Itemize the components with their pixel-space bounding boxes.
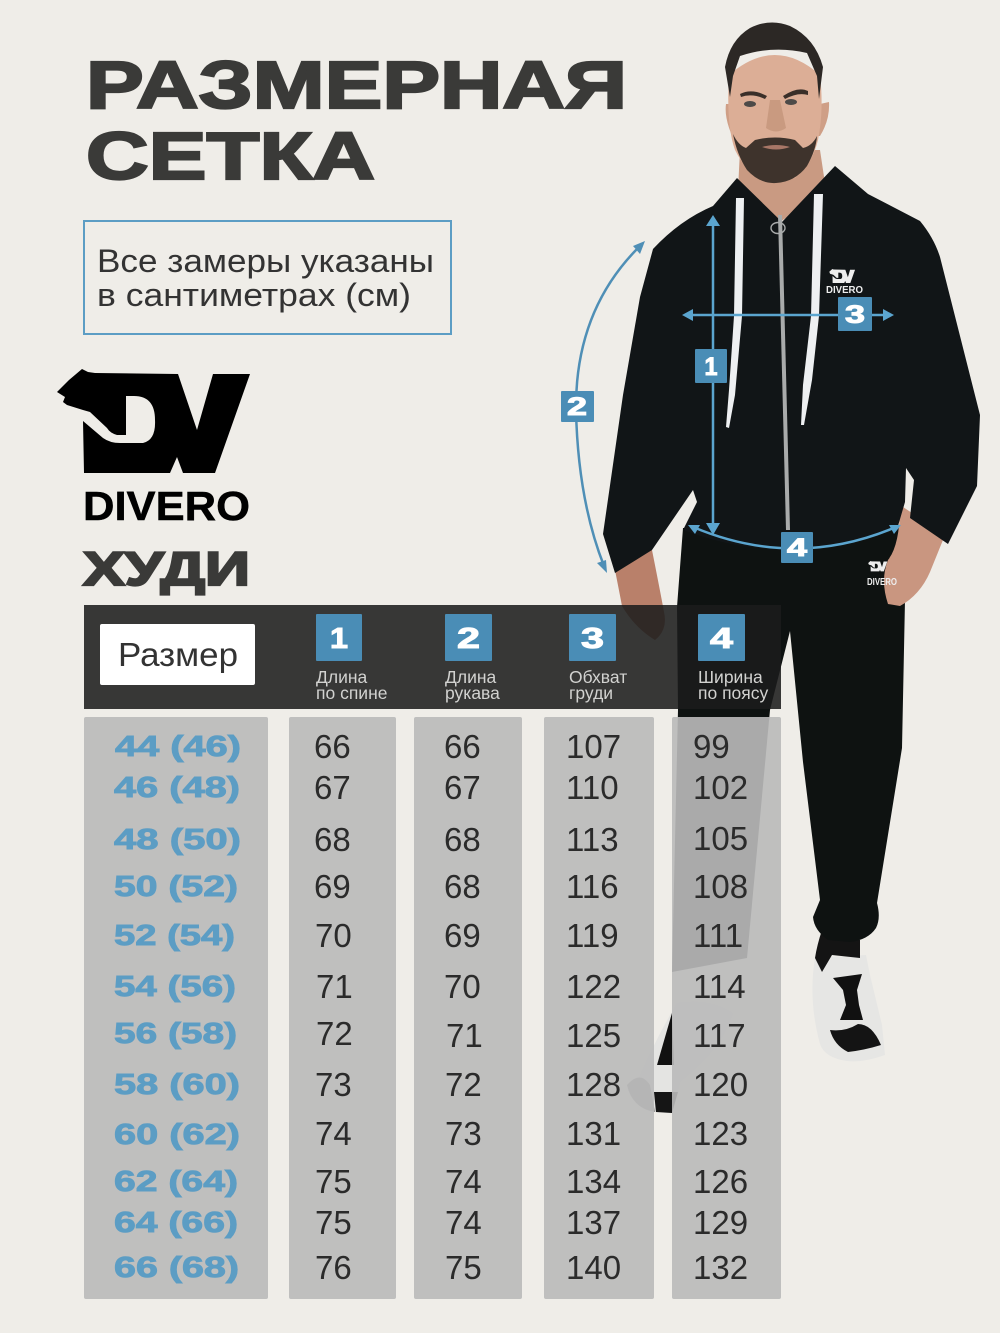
column 2: sleeve length	[414, 717, 522, 1299]
column 1: back length: 72	[316, 1015, 353, 1052]
hoodie	[603, 166, 980, 573]
column: sizes: 52 (54)	[114, 920, 235, 952]
arrow 4: waist width	[688, 525, 901, 563]
column 1 heading: 1	[330, 623, 348, 655]
column 3: chest girth: 128	[566, 1066, 621, 1103]
right hand	[884, 505, 945, 606]
column 4: waist width: 108	[693, 868, 748, 905]
left hand	[612, 540, 665, 640]
size label	[100, 624, 255, 685]
column 3: chest girth: 113	[566, 821, 619, 858]
column 3: chest girth: 116	[566, 868, 619, 905]
hoodie drawstrings	[726, 194, 823, 428]
table header	[84, 605, 781, 709]
column 4: waist width: 102	[693, 769, 748, 806]
arrow 3: chest girth: 3	[845, 301, 865, 329]
column 2 heading: 2	[457, 623, 480, 655]
column 4 heading: Ширина	[698, 667, 763, 687]
column: sizes: 44 (46)	[115, 731, 241, 763]
column: sizes	[84, 717, 268, 1299]
column 3: chest girth: 110	[566, 769, 619, 806]
column 2: sleeve length: 74	[445, 1204, 482, 1241]
column 2: sleeve length: 68	[444, 821, 481, 858]
column 4: waist width: 126	[693, 1163, 748, 1200]
column 3 heading: груди	[569, 683, 613, 703]
column 4: waist width: 123	[693, 1115, 748, 1152]
column: sizes: 60 (62)	[114, 1119, 240, 1151]
column 2: sleeve length: 73	[445, 1115, 482, 1152]
column 1: back length: 73	[315, 1066, 352, 1103]
column 2: sleeve length: 69	[444, 917, 481, 954]
column: sizes: 50 (52)	[114, 871, 238, 903]
arrow 2: sleeve length	[561, 241, 645, 573]
column 4: waist width: 129	[693, 1204, 748, 1241]
arrow 3: chest girth	[682, 297, 894, 331]
column 1: back length: 74	[315, 1115, 352, 1152]
column 4 heading: 4	[710, 623, 733, 655]
column 1 heading	[316, 614, 387, 703]
column 4: waist width	[672, 717, 781, 1299]
column 2: sleeve length: 71	[446, 1017, 483, 1054]
zipper	[771, 215, 788, 530]
column: sizes: 48 (50)	[114, 824, 241, 856]
column 4: waist width: 111	[693, 917, 743, 954]
column 2: sleeve length: 72	[445, 1066, 482, 1103]
column 2: sleeve length: 68	[444, 868, 481, 905]
column 1: back length: 70	[315, 917, 352, 954]
column 3 heading	[569, 614, 627, 703]
column 1: back length: 71	[316, 968, 353, 1005]
title	[86, 48, 627, 194]
column 1: back length: 67	[314, 769, 351, 806]
column 2: sleeve length: 67	[444, 769, 481, 806]
trousers logo	[867, 561, 897, 588]
column: sizes: 46 (48)	[114, 772, 240, 804]
column 4 heading	[698, 614, 769, 703]
column 4: waist width: 120	[693, 1066, 748, 1103]
column 3: chest girth: 107	[566, 728, 621, 765]
head	[725, 22, 829, 183]
column 1: back length: 75	[315, 1204, 352, 1241]
column 4: waist width: 117	[693, 1017, 746, 1054]
photo: man in black tracksuit	[603, 22, 980, 1113]
column 1: back length	[289, 717, 396, 1299]
column 2: sleeve length: 70	[444, 968, 481, 1005]
column 4 heading: по поясу	[698, 683, 769, 703]
column 3 heading: 3	[581, 623, 604, 655]
logo: DIVERO	[57, 369, 250, 529]
trousers	[672, 522, 905, 972]
column: sizes: 62 (64)	[114, 1166, 238, 1198]
column: sizes: 58 (60)	[114, 1069, 240, 1101]
column 3: chest girth: 119	[566, 917, 619, 954]
column 3: chest girth	[544, 717, 654, 1299]
column 2: sleeve length: 75	[445, 1249, 482, 1286]
column 4: waist width: 132	[693, 1249, 748, 1286]
column: sizes: 56 (58)	[114, 1018, 237, 1050]
arrow 1: back length: 1	[704, 353, 718, 381]
column 3: chest girth: 131	[566, 1115, 621, 1152]
note box: measurements in centimetres: в сантиметрах (см)	[97, 277, 411, 313]
column 3: chest girth: 140	[566, 1249, 621, 1286]
hoodie chest logo	[826, 269, 863, 296]
column 4: waist width: 105	[693, 820, 748, 857]
column: sizes: 54 (56)	[114, 971, 236, 1003]
column: sizes: 64 (66)	[114, 1207, 238, 1239]
logo: DIVERO: DIVERO	[83, 483, 250, 529]
column 2: sleeve length: 74	[445, 1163, 482, 1200]
note box: measurements in centimetres: Все замеры указаны	[97, 243, 434, 279]
column 2: sleeve length: 66	[444, 728, 481, 765]
column 2 heading: рукава	[445, 683, 500, 703]
column 3 heading: Обхват	[569, 667, 627, 687]
column 3: chest girth: 125	[566, 1017, 621, 1054]
column 4: waist width: 114	[693, 968, 746, 1005]
column 1: back length: 66	[314, 728, 351, 765]
column 4: waist width: 99	[693, 728, 730, 765]
column 1: back length: 69	[314, 868, 351, 905]
column 3: chest girth: 137	[566, 1204, 621, 1241]
column: sizes: 66 (68)	[114, 1252, 239, 1284]
arrow 1: back length	[695, 215, 727, 535]
heading: product type: ХУДИ	[83, 542, 250, 595]
size label: Размер	[118, 636, 238, 673]
column 1: back length: 68	[314, 821, 351, 858]
column 1 heading: Длина	[316, 667, 368, 687]
column 2 heading	[445, 614, 500, 703]
left shoe	[627, 1002, 733, 1113]
note box: measurements in centimetres	[84, 221, 451, 334]
column 1: back length: 75	[315, 1163, 352, 1200]
column 3: chest girth: 122	[566, 968, 621, 1005]
hoodie chest logo: DIVERO	[826, 285, 863, 296]
column 1: back length: 76	[315, 1249, 352, 1286]
title: СЕТКА	[86, 119, 375, 194]
arrow 4: waist width: 4	[787, 534, 807, 562]
column 1 heading: по спине	[316, 683, 387, 703]
arrow 2: sleeve length: 2	[567, 393, 587, 421]
column 2 heading: Длина	[445, 667, 497, 687]
column 3: chest girth: 134	[566, 1163, 621, 1200]
neck	[738, 150, 826, 222]
trousers logo: DIVERO	[867, 577, 897, 588]
right shoe	[812, 930, 885, 1061]
title: РАЗМЕРНАЯ	[86, 48, 627, 123]
